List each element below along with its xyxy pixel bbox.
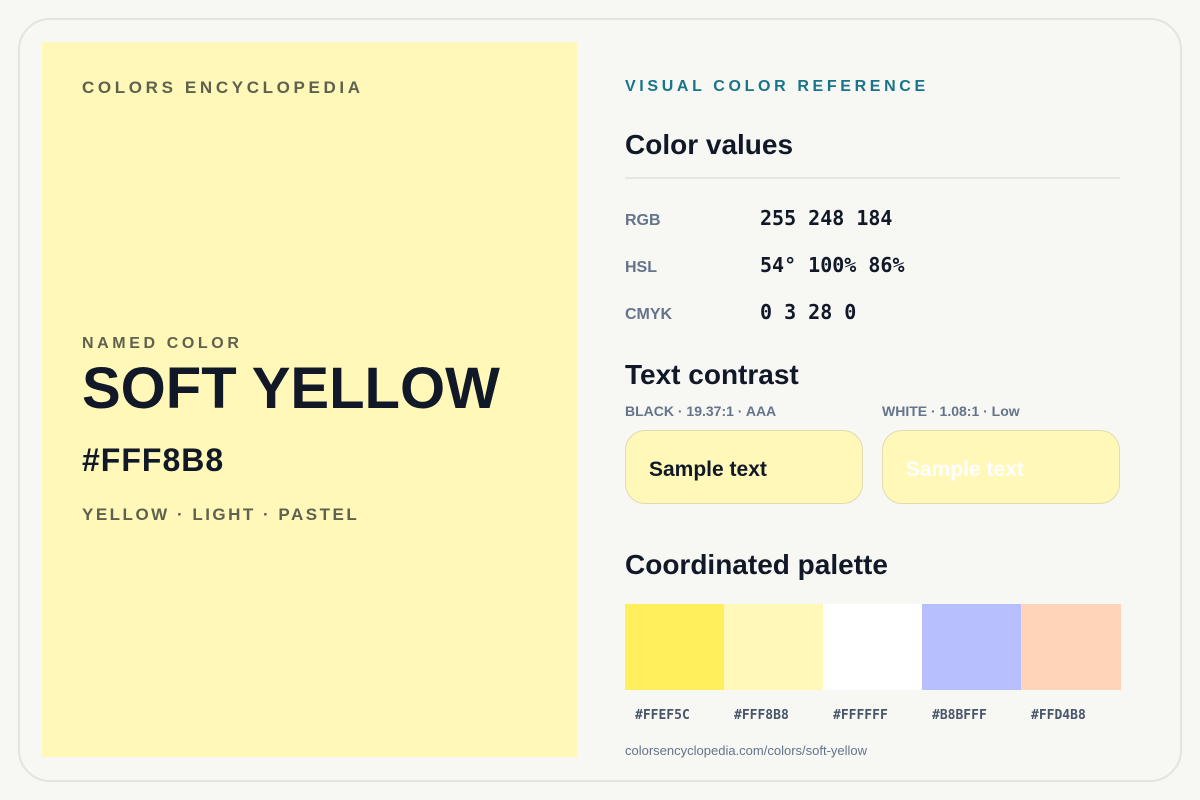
heading: coordinated palette: Coordinated palette <box>625 549 888 580</box>
swatch 5 <box>1021 604 1121 690</box>
swatch 2 <box>724 604 823 690</box>
hex 3: #FFFFFF <box>833 708 888 723</box>
hex 2: #FFF8B8 <box>734 708 789 723</box>
white sample text: Sample text <box>906 458 1024 481</box>
heading: text contrast: Text contrast <box>625 359 799 390</box>
CMYK value: 0 3 28 0 <box>760 300 856 324</box>
source url: colorsencyclopedia.com/colors/soft-yellow <box>625 743 867 758</box>
HSL value: 54° 100% 86% <box>760 253 904 277</box>
eyebrow: VISUAL COLOR REFERENCE <box>625 78 929 95</box>
palette swatches <box>625 604 1121 690</box>
palette hex labels <box>635 708 1086 723</box>
swatch 3 <box>823 604 922 690</box>
RGB value: 255 248 184 <box>760 206 892 230</box>
white contrast label: WHITE · 1.08:1 · Low <box>882 403 1020 419</box>
panel: color swatch <box>42 42 577 757</box>
heading: color values: Color values <box>625 129 793 160</box>
hex 5: #FFD4B8 <box>1031 708 1086 723</box>
named color label: NAMED COLOR <box>82 335 242 352</box>
CMYK label: CMYK <box>625 306 672 323</box>
hex value: #FFF8B8 <box>82 442 224 478</box>
swatch 1 <box>625 604 724 690</box>
divider <box>625 177 1120 179</box>
row: HSL <box>625 253 904 277</box>
row: RGB <box>625 206 892 230</box>
color name: SOFT YELLOW <box>82 356 500 421</box>
brand label: COLORS ENCYCLOPEDIA <box>82 78 364 97</box>
swatch 4 <box>922 604 1021 690</box>
black sample text: Sample text <box>649 458 767 481</box>
white sample box <box>882 430 1120 504</box>
black sample box <box>625 430 863 504</box>
hex 4: #B8BFFF <box>932 708 987 723</box>
panel: color details <box>625 78 1121 758</box>
row: CMYK <box>625 300 856 324</box>
color tags: YELLOW · LIGHT · PASTEL <box>82 505 359 524</box>
HSL label: HSL <box>625 259 657 276</box>
black contrast label: BLACK · 19.37:1 · AAA <box>625 403 776 419</box>
hex 1: #FFEF5C <box>635 708 690 723</box>
RGB label: RGB <box>625 212 661 229</box>
